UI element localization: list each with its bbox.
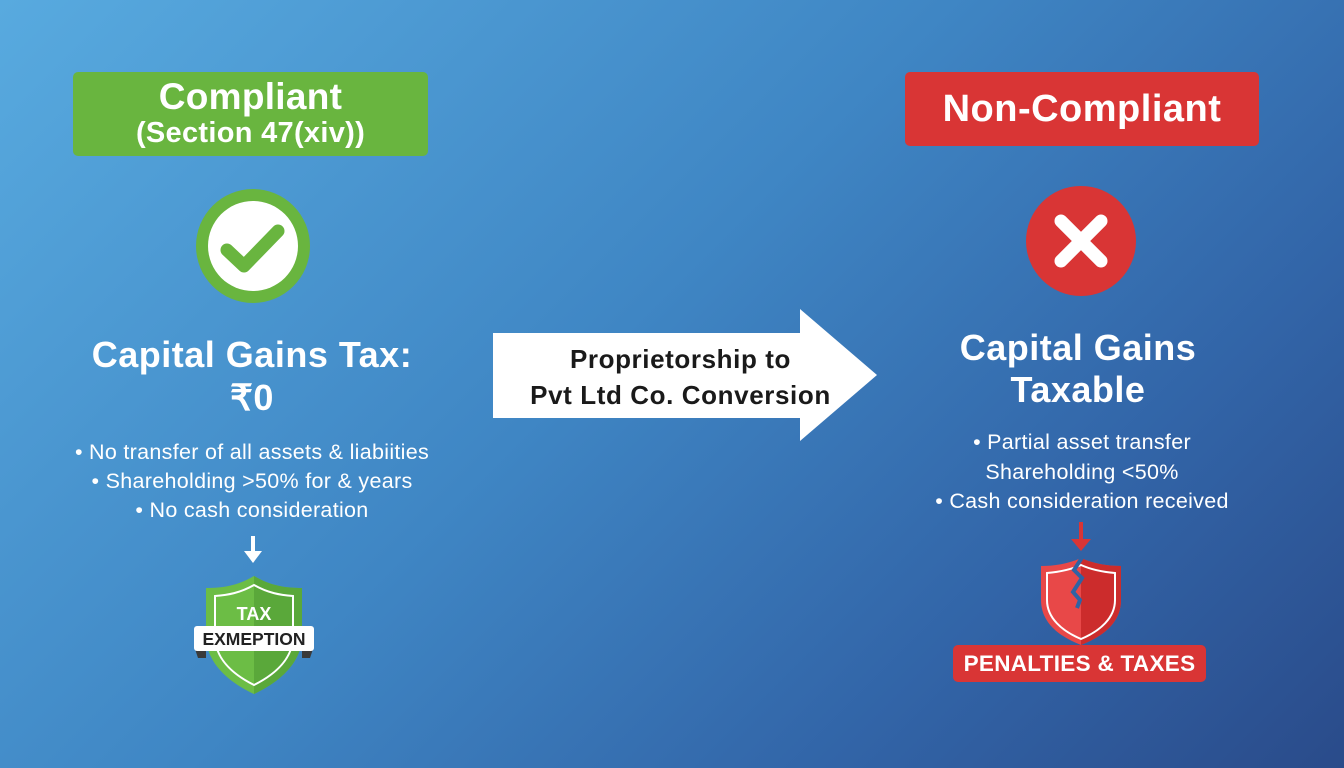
panel: compliant header (73, 72, 428, 156)
text: non-compliant conditions: Shareholding <50% (985, 460, 1179, 484)
text: non-compliant conditions: • Partial asset transfer (973, 430, 1191, 454)
icon: x circle (1026, 186, 1136, 296)
text: non-compliant conditions: • Cash consideration received (935, 489, 1229, 513)
arrow: center conversion (493, 309, 877, 441)
icon: tax exemption shield (194, 576, 314, 694)
heading: capital gains tax zero: Capital Gains Tax: (92, 334, 412, 375)
label: penalties and taxes: PENALTIES & TAXES (964, 651, 1195, 676)
icon: check circle (196, 189, 310, 303)
panel: compliant header: (Section 47(xiv)) (136, 117, 365, 149)
heading: capital gains taxable (960, 327, 1196, 410)
panel: non-compliant header: Non-Compliant (943, 88, 1221, 130)
text: compliant conditions: • No cash consideration (135, 498, 369, 522)
text: compliant conditions: • No transfer of all assets & liabiities (75, 440, 429, 464)
heading: capital gains taxable: Capital Gains (960, 327, 1196, 368)
heading: capital gains tax zero: ₹0 (230, 377, 274, 418)
icon: tax exemption shield: EXMEPTION (202, 629, 306, 649)
panel: compliant header: Compliant (159, 76, 342, 117)
heading: capital gains taxable: Taxable (1011, 369, 1145, 410)
label: penalties and taxes (953, 645, 1206, 682)
arrow: down white (244, 536, 262, 563)
icon: broken shield (1041, 558, 1121, 645)
text: compliant conditions: • Shareholding >50% for & years (92, 469, 412, 493)
arrow: center conversion: Proprietorship to (570, 344, 791, 374)
icon: tax exemption shield: TAX (237, 604, 271, 624)
panel: non-compliant header (905, 72, 1259, 146)
arrow: down red (1071, 522, 1091, 551)
heading: capital gains tax zero (92, 334, 412, 418)
text: compliant conditions (75, 440, 429, 522)
arrow: center conversion: Pvt Ltd Co. Conversion (530, 380, 831, 410)
text: non-compliant conditions (935, 430, 1229, 513)
